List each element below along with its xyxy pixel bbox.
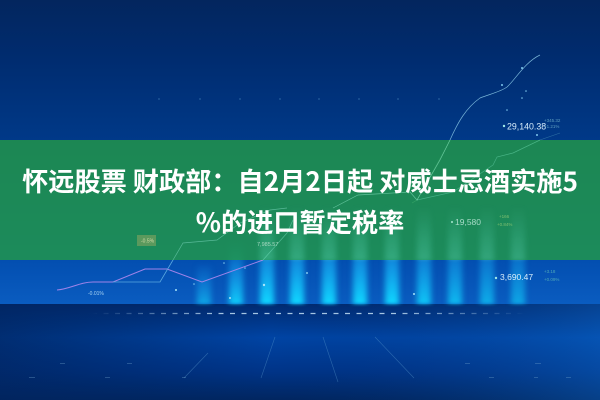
- data label: 19,580: +166: [499, 214, 510, 219]
- upper sky backdrop: [0, 0, 600, 304]
- data label: 7,985.57: 7,985.57: [257, 242, 278, 248]
- headline line 2: %的进口暂定税率: [196, 202, 404, 240]
- lower floor backdrop: [0, 304, 600, 400]
- light columns showing through banner: [260, 205, 525, 260]
- data label: 3,690.47: [495, 269, 559, 282]
- data label: 29,140.38: +345.32: [544, 118, 561, 123]
- line chart on banner: right bright series: [417, 140, 540, 200]
- line chart on banner: left bright series: [263, 220, 293, 260]
- data label: 29,140.38: 29,140.38: [507, 122, 546, 132]
- badge: percent tag: [137, 235, 156, 246]
- headline text: [22, 161, 578, 240]
- data label: 3,690.47: 3,690.47: [500, 272, 533, 282]
- data label: 19,580: 19,580: [455, 217, 481, 227]
- line chart on banner: pale series: [173, 208, 287, 260]
- line chart on banner: right pale series: [333, 140, 450, 208]
- dashed horizon line: [92, 312, 525, 314]
- headline line 1: 怀远股票 财政部：自2月2日起 对威士忌酒实施5: [22, 161, 578, 199]
- line chart: purple series: [57, 260, 263, 290]
- green title banner: [0, 140, 600, 260]
- line chart: rising blue curve: [412, 55, 540, 203]
- data label: -0.0%: -0.01%: [88, 291, 104, 297]
- line chart: secondary right curve: [497, 133, 560, 157]
- badge: percent tag: -0.5%: [141, 238, 155, 244]
- data label: 3,690.47: +0.09%: [544, 277, 559, 282]
- glowing light beams: [197, 215, 525, 304]
- floor grid marks: [29, 363, 571, 378]
- data label: 19,580: +0.84%: [497, 222, 512, 227]
- data label: 3,690.47: +3.18: [544, 269, 556, 274]
- data label: 29,140.38: +1.21%: [544, 124, 559, 129]
- scattered star dots: [158, 67, 538, 299]
- data label: 29,140.38: [503, 118, 561, 132]
- floor perspective streaks: [184, 337, 414, 382]
- data label: 19,580: [451, 214, 512, 227]
- line chart: pale blue series: [113, 260, 173, 282]
